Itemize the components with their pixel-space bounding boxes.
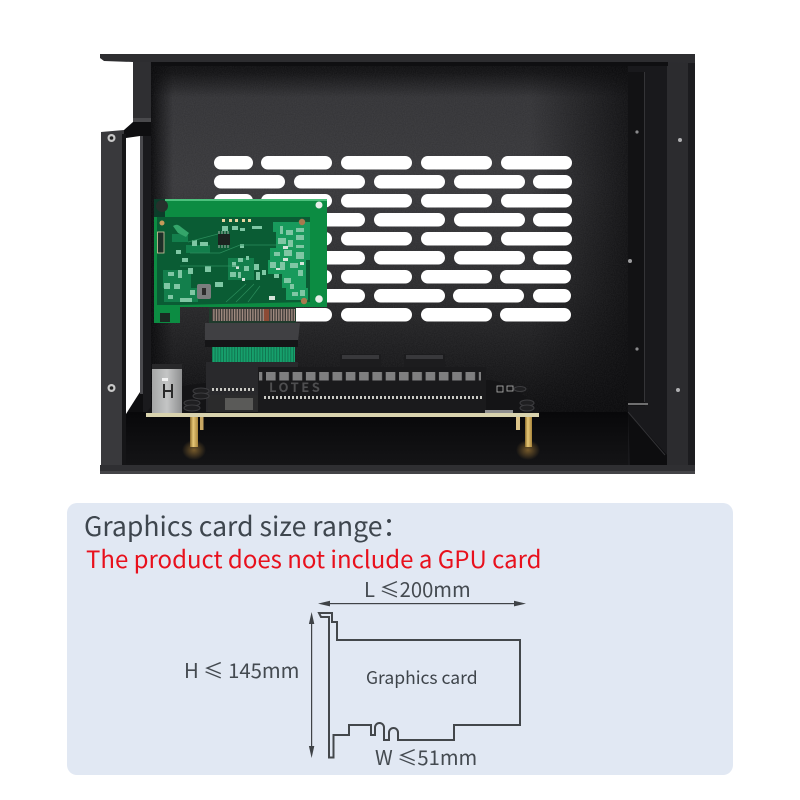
green adapter card xyxy=(154,199,327,323)
bracket screw holes xyxy=(108,134,116,392)
card body xyxy=(154,199,327,323)
small connectors xyxy=(340,354,445,368)
gold fingers xyxy=(212,347,295,362)
silkscreen block xyxy=(208,395,258,412)
inductor xyxy=(197,284,211,299)
bottom flange xyxy=(100,465,695,474)
chassis floor xyxy=(124,412,630,466)
left upper post xyxy=(133,62,151,123)
height label: H ≤ 145mm xyxy=(184,654,299,684)
right side flange xyxy=(667,62,695,474)
width label: W ≤51mm xyxy=(375,742,477,771)
riser socket xyxy=(206,362,298,412)
tab connector xyxy=(160,313,170,322)
card label: Graphics card xyxy=(366,665,478,690)
chassis back wall xyxy=(151,62,631,414)
small parts at right xyxy=(497,386,513,392)
LOTES mark: LOTES xyxy=(269,377,322,396)
mounting holes xyxy=(156,200,323,304)
chip xyxy=(218,231,230,248)
USB connector xyxy=(152,364,182,413)
left card region xyxy=(154,199,165,217)
heading: Graphics card size range： xyxy=(84,505,409,544)
length label: L ≤200mm xyxy=(364,574,471,603)
screw stacks xyxy=(184,386,534,411)
standoff floor reflections xyxy=(182,440,540,460)
right inner wall xyxy=(628,62,668,466)
copper blob xyxy=(173,225,189,237)
brass standoffs xyxy=(190,417,532,447)
riser board xyxy=(146,354,540,460)
mid and left clusters xyxy=(163,234,254,302)
header xyxy=(158,232,164,253)
back wall left shadow xyxy=(151,62,173,414)
arrow: length xyxy=(318,601,526,606)
card edge socket xyxy=(205,307,300,347)
board edge xyxy=(146,413,539,417)
top flange xyxy=(100,54,695,66)
header strip xyxy=(485,410,513,413)
gold test points xyxy=(222,219,251,222)
graphics card outline xyxy=(319,613,520,758)
panel: graphics card size range xyxy=(67,503,733,775)
photo: open metal chassis xyxy=(100,54,695,474)
red notice: The product does not include a GPU card xyxy=(86,540,542,575)
traces xyxy=(180,234,280,302)
left bracket xyxy=(101,122,151,473)
pin row xyxy=(212,388,256,391)
board top xyxy=(146,380,539,413)
arrow: height xyxy=(309,612,314,758)
ventilation slots xyxy=(214,156,572,322)
small components xyxy=(164,226,305,302)
wall grain xyxy=(151,62,631,414)
right component cluster xyxy=(268,222,310,300)
back wall right shadow xyxy=(530,62,630,414)
PCIe slot xyxy=(258,367,486,413)
